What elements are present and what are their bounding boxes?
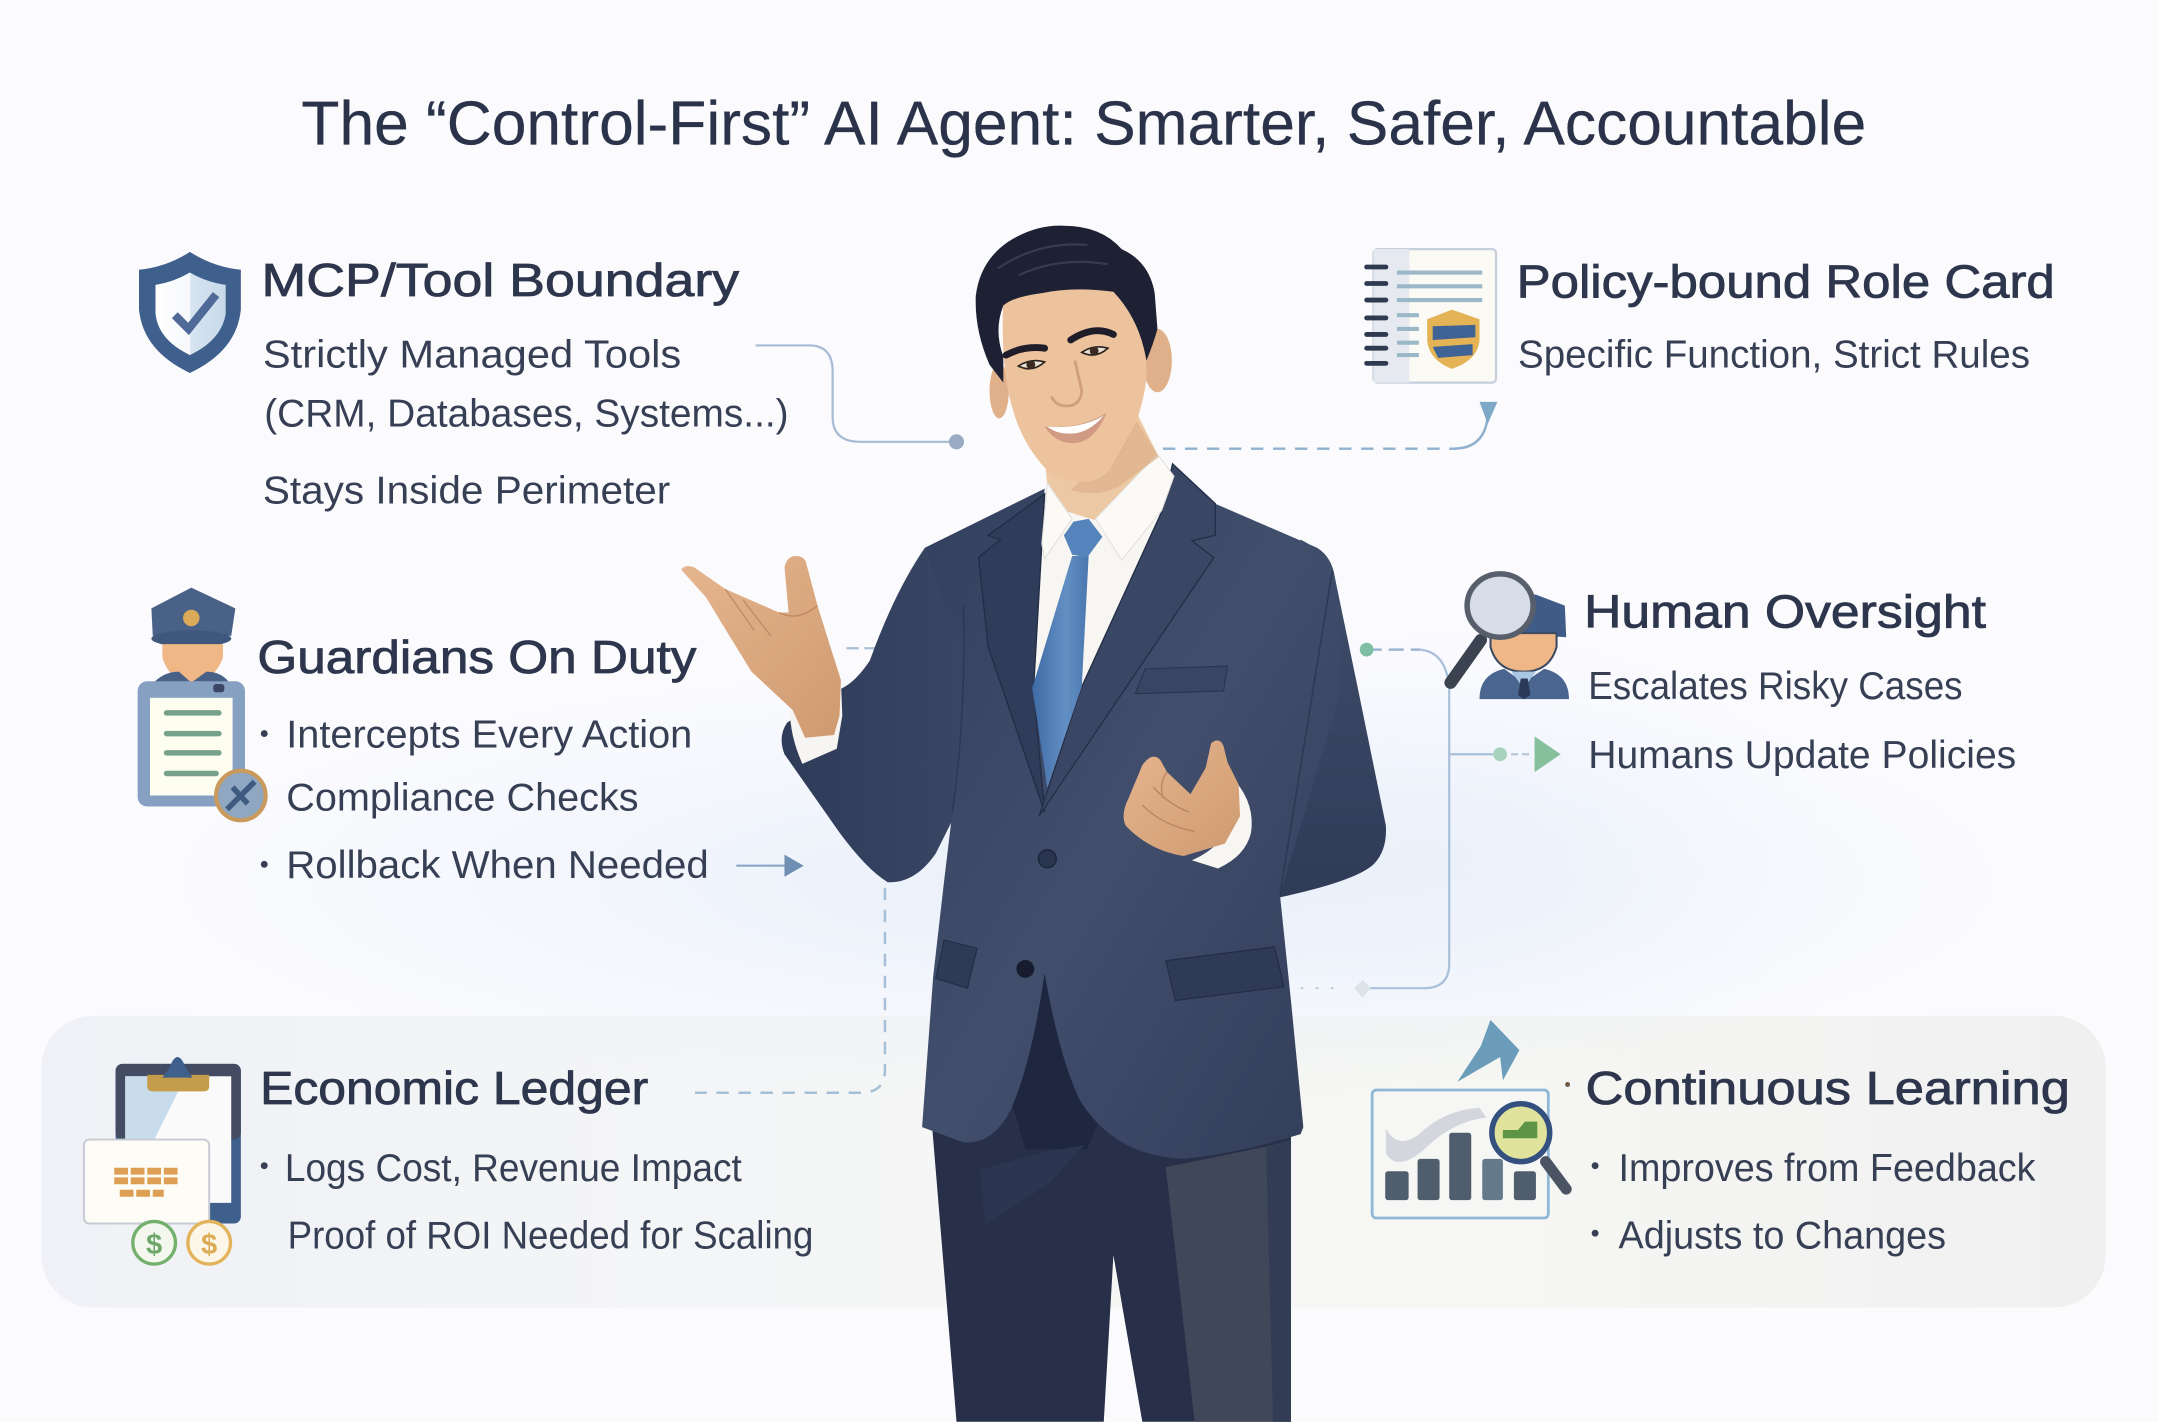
icon: guardian with clipboard [138, 588, 266, 820]
text: Continuous Learning: Adjusts to Changes [1618, 1214, 1946, 1257]
text: Human Oversight [1584, 586, 2016, 777]
right sleeve [1211, 540, 1386, 897]
text: MCP/Tool Boundary: Strictly Managed Tools [263, 333, 681, 376]
eyebrows [1006, 331, 1113, 355]
trousers [932, 963, 1291, 1422]
text: MCP/Tool Boundary: MCP/Tool Boundary [261, 254, 740, 306]
text: Economic Ledger: Logs Cost, Revenue Impact [285, 1147, 742, 1190]
necktie [1032, 519, 1102, 787]
face [1003, 282, 1146, 481]
neck [1043, 413, 1159, 520]
presenter figure [681, 226, 1386, 1422]
text: Economic Ledger [260, 1062, 813, 1257]
text: Human Oversight: Human Oversight [1584, 586, 1986, 638]
left sleeve [782, 548, 991, 882]
icon: economic ledger clipboard: $ [146, 1229, 162, 1261]
icon: learning chart [1372, 1020, 1570, 1218]
left cuff [790, 680, 842, 764]
text: Human Oversight: Humans Update Policies [1588, 734, 2016, 777]
shirt [1028, 476, 1173, 702]
icon: economic ledger clipboard [84, 1057, 241, 1264]
connector: economic ledger to agent [695, 888, 885, 1093]
left lapel [979, 494, 1045, 812]
connector: agent to role card [1163, 402, 1497, 449]
text: Guardians On Duty: Guardians On Duty [257, 631, 697, 683]
text: Continuous Learning [1585, 1062, 2070, 1257]
sleeve seams [952, 571, 1332, 895]
text: Economic Ledger: Economic Ledger [260, 1062, 648, 1114]
text: Continuous Learning: Continuous Learning [1585, 1062, 2070, 1114]
icon: economic ledger clipboard: $ [201, 1229, 217, 1261]
pockets and buttons [936, 666, 1284, 1001]
text: Guardians On Duty: Intercepts Every Action [286, 713, 692, 756]
shirt collar [1042, 454, 1174, 560]
text: MCP/Tool Boundary [261, 254, 789, 513]
hair highlights [998, 244, 1108, 275]
text: Continuous Learning: Improves from Feedback [1618, 1147, 2036, 1190]
title: The “Control-First” AI Agent: Smarter, Safer, Accountable [301, 90, 1866, 159]
ears [990, 329, 1172, 418]
eyes [1018, 347, 1108, 369]
hair [976, 226, 1157, 383]
text: Policy-bound Role Card: Policy-bound Role Card [1517, 255, 2055, 307]
left hand [681, 556, 841, 738]
panel: bottom band [41, 1016, 2106, 1307]
jacket body [922, 464, 1342, 1159]
jaw shadow [1071, 421, 1159, 493]
text: MCP/Tool Boundary: (CRM, Databases, Systems...) [264, 393, 789, 436]
icon: role card notebook [1367, 249, 1496, 383]
icon: shield [139, 252, 241, 373]
connector: guardians to agent [846, 647, 888, 649]
text: MCP/Tool Boundary: Stays Inside Perimeter [263, 470, 670, 513]
smile [1045, 413, 1107, 443]
icon: human oversight [1451, 574, 1569, 699]
text: Policy-bound Role Card [1517, 255, 2055, 376]
text: Economic Ledger: Proof of ROI Needed for Scaling [288, 1214, 813, 1257]
connector: MCP boundary to agent [756, 345, 964, 449]
text: Guardians On Duty: Rollback When Needed [286, 844, 709, 887]
text: Policy-bound Role Card: Specific Function, Strict Rules [1518, 333, 2030, 376]
nose [1051, 361, 1082, 406]
right cuff [1192, 782, 1252, 868]
right hand [1124, 740, 1240, 856]
arrow: rollback [736, 855, 804, 877]
text: Guardians On Duty: Compliance Checks [286, 777, 639, 820]
connector: human oversight [1301, 643, 1449, 998]
arrow: humans update policies [1449, 736, 1561, 772]
text: Human Oversight: Escalates Risky Cases [1588, 665, 1963, 708]
right lapel [1039, 464, 1215, 816]
text: Guardians On Duty [257, 631, 709, 887]
